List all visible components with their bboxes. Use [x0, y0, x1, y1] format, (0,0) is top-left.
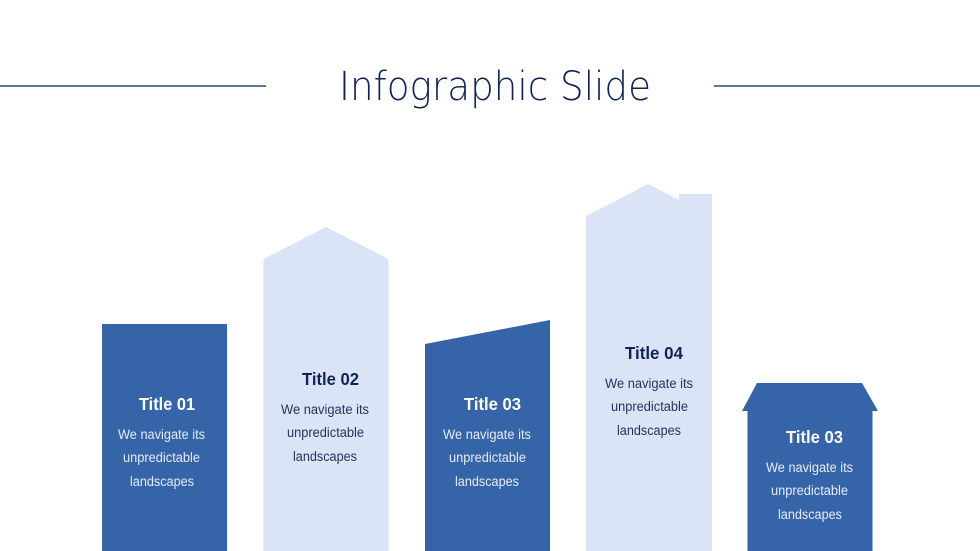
- heading: title 01: Title 01: [139, 394, 195, 414]
- text block: title 01 description: [118, 427, 205, 489]
- text block: title 04 description: [605, 376, 693, 438]
- shape: house column with eaves: [742, 383, 878, 551]
- text block: title 02 description: We navigate its: [281, 402, 369, 417]
- text block: title 04 description: unpredictable: [611, 399, 688, 414]
- text block: title 03 description: landscapes: [778, 507, 842, 522]
- text block: title 01 description: unpredictable: [123, 450, 200, 465]
- text block: title 01 description: We navigate its: [118, 427, 205, 442]
- text block: title 03 description: landscapes: [455, 474, 519, 489]
- shape: slanted-roof column: [425, 320, 550, 551]
- title: Infographic Slide: [339, 64, 651, 110]
- heading: title 03: Title 03: [464, 394, 521, 414]
- shape: peaked column: [264, 227, 388, 551]
- panel: title 02: [264, 227, 388, 551]
- text block: title 02 description: unpredictable: [287, 425, 364, 440]
- text block: title 03 description: [443, 427, 531, 489]
- text block: title 04 description: landscapes: [617, 423, 681, 438]
- heading: title 02: Title 02: [302, 369, 359, 389]
- panel: title 03 house: [742, 383, 878, 551]
- text block: title 03 description: unpredictable: [771, 483, 848, 498]
- shape: flat-top column: [102, 324, 227, 551]
- panel: title 01: [102, 324, 227, 551]
- text block: title 03 description: We navigate its: [766, 460, 853, 475]
- text block: title 01 description: landscapes: [130, 474, 194, 489]
- panel: title 03 slanted: [425, 320, 550, 551]
- shape: peaked column with chimney: [586, 184, 712, 551]
- text block: title 03 description: We navigate its: [443, 427, 531, 442]
- text block: title 02 description: [281, 402, 369, 464]
- heading: title 04: Title 04: [625, 343, 683, 363]
- panel: title 04: [586, 184, 712, 551]
- heading: title 03: Title 03: [786, 427, 843, 447]
- text block: title 04 description: We navigate its: [605, 376, 693, 391]
- text block: title 02 description: landscapes: [293, 449, 357, 464]
- text block: title 03 description: unpredictable: [449, 450, 526, 465]
- text block: title 03 description: [766, 460, 853, 522]
